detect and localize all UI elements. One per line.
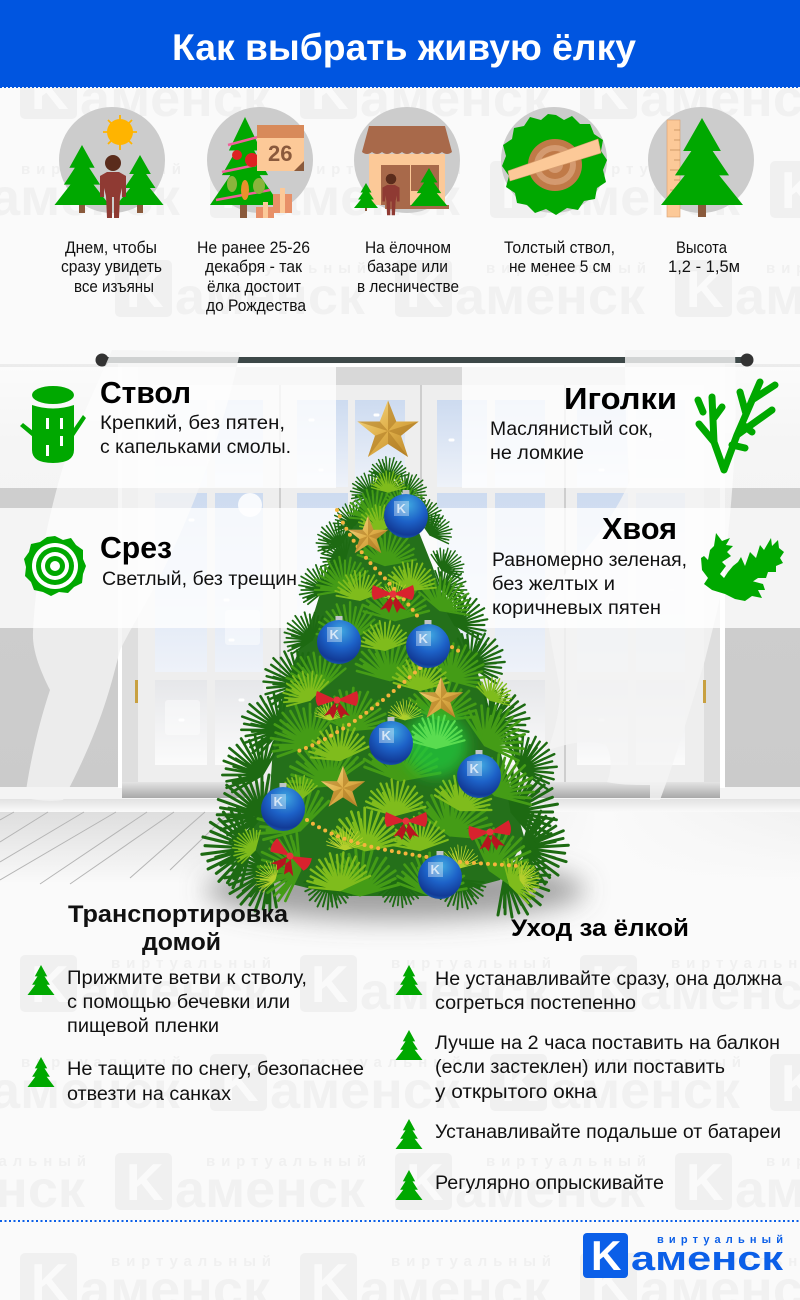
transport tip 2: отвезти на санках [67,1084,232,1105]
bows [262,585,514,883]
care tip 2 [435,1033,780,1103]
label: date: до Рождества [206,297,307,315]
transport tip 2 [67,1059,364,1105]
label: thick trunk: Толстый ствол, [504,239,615,257]
icon: thick trunk with ruler [501,107,607,215]
curtain rod [96,354,754,366]
translucent text panels [0,367,800,628]
label: date: декабря - так [205,258,303,276]
title banner [0,0,800,87]
heading: transport: Транспортировка [68,901,289,928]
label: daytime: Днем, чтобы [65,239,157,257]
icon: daytime trees and person [54,107,165,218]
yellow-green highlights [248,581,546,897]
transport tip 1: с помощью бечевки или [67,992,290,1013]
heading: transport [68,901,289,956]
text: needles: Маслянистый сок, [490,419,653,440]
bullet icon [396,1119,422,1149]
icon: decorated tree and calendar: 26 [268,141,292,166]
icon: tree cut [24,536,86,596]
title banner: Как выбрать живую ёлку [172,27,636,68]
transport tip 2: Не тащите по снегу, безопаснее [67,1059,364,1080]
label: daytime [61,239,162,296]
text: trunk: Крепкий, без пятен, [100,413,285,434]
panel: needles [490,381,775,470]
tree-top star [357,400,419,457]
bullet icon [396,1170,422,1200]
left curtain [25,350,240,801]
bullet icon [28,1057,54,1087]
care tip 1: Не устанавливайте сразу, она должна [435,969,782,990]
heading: cut: Срез [100,530,172,565]
panel: pine needles [492,511,784,619]
panel: trunk [20,375,291,463]
label: height: Высота [676,239,728,257]
label: height: 1,2 - 1,5м [668,258,740,276]
label: thick trunk [504,239,615,276]
transport tip 1 [67,968,307,1037]
footer divider [0,1220,800,1222]
tree shadow [205,860,585,920]
bright green branches [226,471,548,907]
label: place: На ёлочном [365,239,451,257]
text: cut: Светлый, без трещин [102,569,297,590]
icon: trunk [20,386,86,463]
section: tree care [396,915,782,1200]
bullet icon [396,1030,422,1060]
care tip 4: Регулярно опрыскивайте [435,1173,664,1194]
window frame [118,364,725,798]
glow highlight [404,713,468,777]
transport tip 1: Прижмите ветви к стволу, [67,968,307,989]
ornaments [261,490,501,899]
garlands [293,510,520,866]
text: trunk [100,413,291,458]
icon: pine sprig [701,533,784,601]
text: pine needles: Равномерно зеленая, [492,550,687,571]
panel: cut [24,530,297,596]
label: daytime: сразу увидеть [61,258,162,276]
logo: K [591,1232,621,1279]
care tip 2: (если застеклен) или поставить [435,1057,725,1078]
bullet icon [396,965,422,995]
text: pine needles: без желтых и [492,574,615,595]
transport tip 1: пищевой пленки [67,1016,219,1037]
baseboard [0,787,800,800]
room scene [0,350,800,884]
stars on tree [321,516,463,807]
christmas tree [200,400,570,930]
logo: аменск [631,1240,784,1278]
care tip 2: Лучше на 2 часа поставить на балкон [435,1033,780,1054]
right curtain [545,350,736,800]
care tip 1: согреться постепенно [435,993,636,1014]
text: pine needles [492,550,687,619]
window sill [122,782,720,798]
text: trunk: с капельками смолы. [100,437,291,458]
heading: transport: домой [142,929,221,956]
text: pine needles: коричневых пятен [492,598,661,619]
care tip 3: Устанавливайте подальше от батареи [435,1122,781,1143]
label: place [357,239,459,296]
dark outer branches [200,457,570,930]
label: daytime: все изъяны [74,278,154,296]
label: date [197,239,310,315]
logo [583,1232,784,1279]
icon: needles branch [698,382,775,470]
label: date: Не ранее 25-26 [197,239,310,257]
icon: height ruler and tree [648,107,754,217]
logo: виртуальный [657,1234,783,1246]
bullet icon [28,965,54,995]
heading: trunk: Ствол [100,375,191,410]
icon: decorated tree and calendar [207,107,313,218]
label: place: базаре или [367,258,448,276]
icon: tree market house [354,107,460,215]
label: place: в лесничестве [357,278,459,296]
care tip 1 [435,969,782,1014]
text: needles: не ломкие [490,443,584,464]
heading: care: Уход за ёлкой [511,915,689,942]
floor [0,812,800,884]
mid green branches [245,479,548,903]
wall [0,364,800,788]
tree body [240,470,525,896]
text: needles [490,419,653,464]
label: date: ёлка достоит [207,278,301,296]
heading: pine needles: Хвоя [602,511,677,546]
label: height [668,239,740,276]
heading: needles: Иголки [564,381,677,416]
label: thick trunk: не менее 5 см [509,258,611,276]
section: transport home [28,901,364,1105]
care tip 2: у открытого окна [435,1082,597,1103]
